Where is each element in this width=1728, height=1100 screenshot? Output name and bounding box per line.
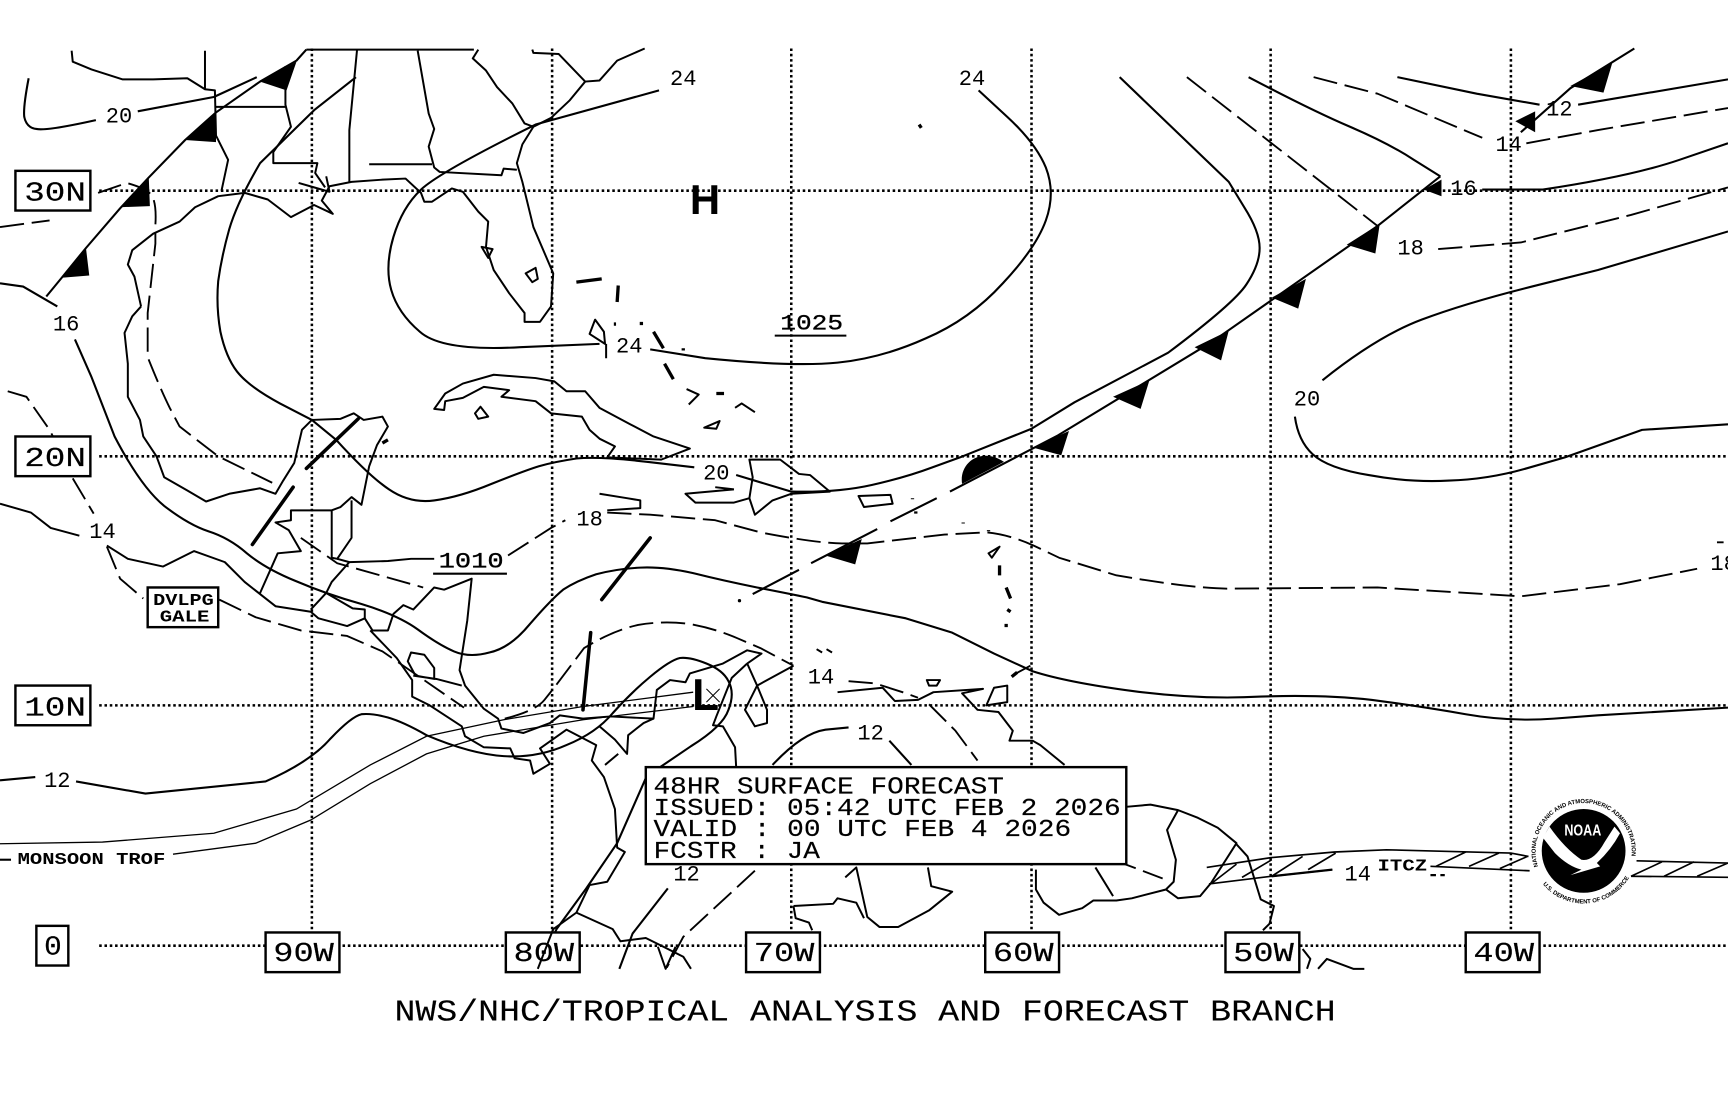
US states — [72, 48, 645, 191]
logo name: NOAA — [1564, 822, 1601, 839]
isobar 16 — [0, 283, 1728, 720]
isobar value labels: 16 — [53, 313, 79, 338]
40W — [1466, 932, 1540, 972]
isobar value labels: 18 — [576, 508, 603, 533]
50W: 50W — [1233, 939, 1294, 969]
forecast info box — [646, 767, 1126, 866]
30N: 30N — [24, 179, 86, 209]
monsoon trough — [0, 692, 693, 869]
developing gale box: DVLPG — [153, 591, 214, 610]
isobar value labels: 12 — [673, 863, 700, 888]
longitude labels — [266, 932, 1540, 972]
isobar value labels: 20 — [703, 461, 730, 486]
isobar 12 — [0, 658, 911, 969]
0 — [36, 926, 68, 966]
developing gale box — [148, 587, 218, 627]
isobar value labels: 14 — [1344, 863, 1371, 888]
NOAA logo — [1532, 798, 1636, 904]
coastline crossing 80W label — [538, 929, 553, 969]
dashed isobars — [0, 183, 1697, 968]
Caribbean islands — [590, 320, 1000, 653]
isobar value labels: 14 — [808, 665, 834, 690]
pressure 1025: 1025 — [780, 312, 843, 337]
0: 0 — [44, 933, 62, 963]
Central America — [370, 630, 691, 969]
tropical waves — [252, 419, 650, 710]
30N — [15, 171, 90, 211]
isobar value labels: 24 — [670, 67, 696, 92]
latitude labels — [15, 171, 90, 966]
50W — [1225, 932, 1299, 972]
70W — [746, 932, 820, 972]
forecast info box: FCSTR : JA — [654, 839, 820, 866]
isobar value labels: 12 — [44, 769, 71, 794]
pressure centers — [433, 176, 846, 720]
pressure 1010: 1010 — [439, 550, 504, 575]
forecast info box: VALID : 00 UTC FEB 4 2026 — [654, 817, 1071, 844]
Gulf coast and Florida — [128, 82, 585, 322]
ITCZ: ITCZ — [1378, 857, 1427, 876]
South America north coast — [793, 805, 1364, 969]
Colombia and Venezuela — [600, 664, 793, 767]
90W — [266, 932, 339, 972]
isobar value labels: 18 — [1397, 237, 1424, 262]
NOAA logo: NATIONAL OCEANIC AND ATMOSPHERIC ADMINISTRATION — [1532, 798, 1636, 868]
ITCZ — [1207, 850, 1728, 884]
isobar value labels: 12 — [857, 722, 884, 747]
Mexico and Yucatan — [0, 306, 762, 733]
10N: 10N — [24, 693, 86, 723]
logo white swoosh — [1543, 827, 1620, 875]
low center X — [706, 689, 720, 702]
forecast info box: ISSUED: 05:42 UTC FEB 2 2026 — [654, 796, 1121, 823]
isobar value labels: 24 — [959, 67, 985, 92]
20N — [15, 436, 90, 476]
low pressure L: L — [692, 671, 719, 720]
isobar value labels: 16 — [1450, 177, 1477, 202]
90W: 90W — [273, 939, 334, 969]
high pressure H: H — [690, 176, 720, 223]
NOAA logo: U.S. DEPARTMENT OF COMMERCE — [1544, 876, 1629, 904]
isobar 24 and 20 loop — [217, 77, 1260, 501]
footer credit: NWS/NHC/TROPICAL ANALYSIS AND FORECAST BRANCH — [395, 996, 1336, 1031]
isobar 20 west — [24, 77, 257, 129]
isobar value labels: 14 — [1495, 133, 1522, 158]
Hispaniola — [685, 460, 830, 515]
isobars north east — [1249, 77, 1728, 190]
stationary front — [738, 176, 1441, 602]
isobar 24 — [388, 90, 1051, 364]
cold front northwest — [46, 50, 306, 296]
60W — [985, 932, 1059, 972]
forecast info box: 48HR SURFACE FORECAST — [654, 775, 1004, 802]
isobar value labels — [44, 67, 1728, 888]
isobar value labels: 24 — [616, 335, 642, 360]
10N — [15, 686, 90, 725]
40W: 40W — [1473, 939, 1534, 969]
monsoon trough: MONSOON TROF — [18, 850, 165, 869]
80W: 80W — [514, 939, 574, 969]
isobar value labels: 20 — [106, 104, 132, 129]
20N: 20N — [24, 444, 86, 474]
isobar 20 east — [1295, 231, 1728, 481]
developing gale box: GALE — [160, 608, 209, 627]
70W: 70W — [754, 939, 815, 969]
coordinate grid — [99, 48, 1728, 946]
small cold front northeast — [1515, 48, 1634, 132]
isobar value labels: 12 — [1546, 98, 1573, 123]
80W — [506, 932, 580, 972]
coastlines and borders — [0, 48, 1364, 969]
isobar value labels: 14 — [89, 520, 116, 545]
Cuba — [434, 375, 690, 460]
isobar value labels: 20 — [1294, 388, 1320, 413]
60W: 60W — [993, 939, 1054, 969]
